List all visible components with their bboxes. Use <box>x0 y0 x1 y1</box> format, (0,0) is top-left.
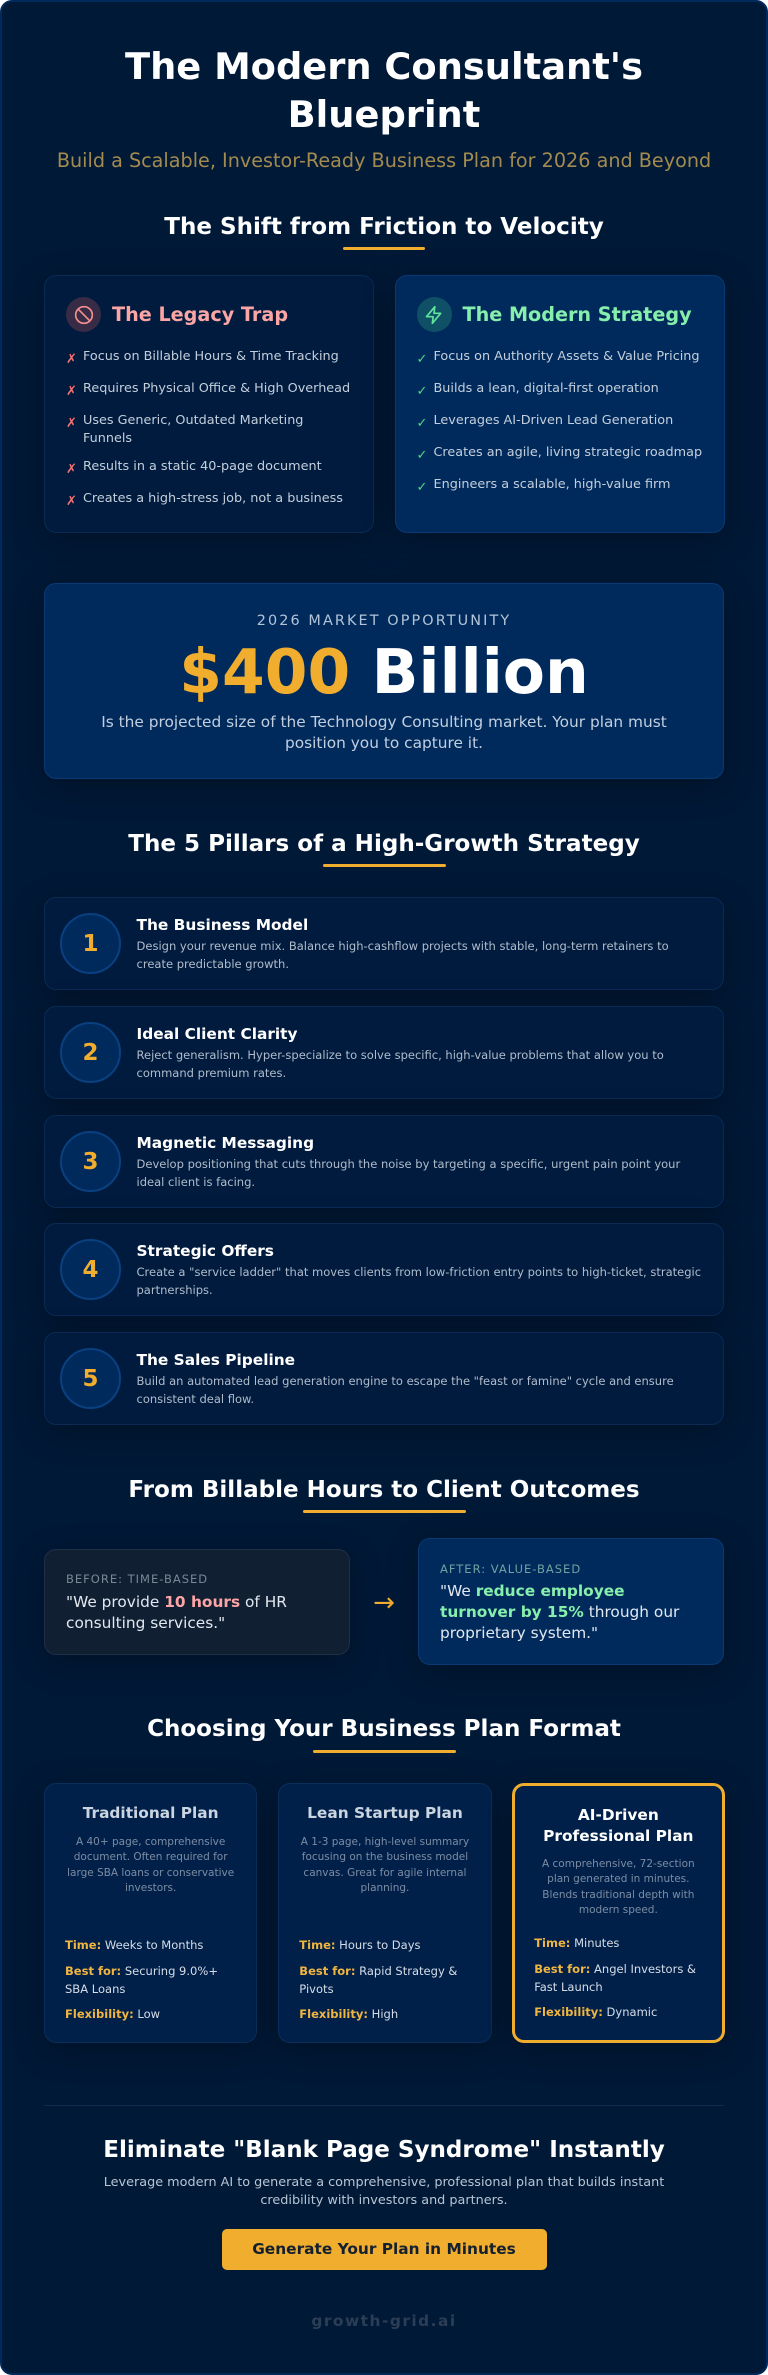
ai best for: Best for: Angel Investors & Fast Launch <box>534 1962 696 1994</box>
number 5: 5 <box>82 1366 98 1392</box>
heading: outcomes: From Billable Hours to Client Outcomes <box>128 1477 640 1503</box>
number 4: 4 <box>82 1256 98 1282</box>
heading: shift: The Shift from Friction to Velocity <box>164 214 604 240</box>
panel: before <box>44 1549 350 1655</box>
number 1: 1 <box>82 930 98 956</box>
pillar 3 <box>44 1115 724 1208</box>
modern list <box>416 348 702 494</box>
traditional flexibility: Flexibility: Low <box>65 2007 160 2021</box>
plan: ai-driven <box>512 1783 725 2043</box>
modern list: Creates an agile, living strategic roadmap <box>434 444 702 460</box>
modern list: ✓ <box>416 448 427 462</box>
ai title: Professional Plan <box>543 1827 694 1845</box>
heading underline <box>312 1750 456 1753</box>
cta button: Generate Your Plan in Minutes <box>252 2240 516 2258</box>
pillar 5 text: Build an automated lead generation engine to escape the "feast or famine" cycle and ensure consistent deal flow. <box>136 1374 674 1406</box>
title <box>125 45 643 136</box>
pillar 2 <box>44 1006 724 1099</box>
number 5 <box>60 1348 121 1409</box>
traditional best for: Best for: Securing 9.0%+ SBA Loans <box>65 1964 218 1996</box>
pillar 5 title: The Sales Pipeline <box>136 1351 295 1369</box>
number 4 <box>60 1239 121 1300</box>
panel: the legacy trap <box>44 275 374 533</box>
cta heading: Eliminate "Blank Page Syndrome" Instantly <box>103 2137 665 2163</box>
pillar 4 <box>44 1223 724 1316</box>
lean time: Time: Hours to Days <box>299 1938 421 1952</box>
traditional time: Time: Weeks to Months <box>65 1938 203 1952</box>
modern list: Focus on Authority Assets & Value Pricing <box>434 348 700 364</box>
ai description: A comprehensive, 72-section plan generated in minutes. Blends traditional depth with modern speed. <box>542 1858 695 1916</box>
legacy list: ✗ <box>66 462 77 476</box>
panel: market opportunity <box>44 583 724 779</box>
number 2: 2 <box>82 1040 98 1066</box>
modern list: ✓ <box>416 384 427 398</box>
number 1 <box>60 913 121 974</box>
traditional title: Traditional Plan <box>83 1804 219 1822</box>
market label: 2026 MARKET OPPORTUNITY <box>257 613 511 629</box>
number 2 <box>60 1022 121 1083</box>
pillar 3 text: Develop positioning that cuts through the noise by targeting a specific, urgent pain point your ideal client is facing. <box>136 1156 680 1188</box>
pillar 1 <box>44 897 724 990</box>
title: Blueprint <box>288 93 480 136</box>
heading underline <box>343 247 425 250</box>
pillar 3 title: Magnetic Messaging <box>136 1134 314 1152</box>
plan: traditional <box>44 1783 257 2043</box>
lean best for: Best for: Rapid Strategy & Pivots <box>299 1964 457 1996</box>
modern list: ✓ <box>416 352 427 366</box>
legacy list: Creates a high-stress job, not a business <box>83 490 343 506</box>
cta button <box>222 2229 546 2270</box>
pillar 4 text: Create a "service ladder" that moves clients from low-friction entry points to high-ticket, strategic partnerships. <box>136 1264 701 1296</box>
lean title: Lean Startup Plan <box>307 1804 463 1822</box>
modern list: Builds a lean, digital-first operation <box>434 380 659 396</box>
lean flexibility: Flexibility: High <box>299 2007 398 2021</box>
modern list: ✓ <box>416 416 427 430</box>
subtitle: Build a Scalable, Investor-Ready Business Plan for 2026 and Beyond <box>57 149 711 172</box>
after quote: "We reduce employee turnover by 15% through our proprietary system." <box>440 1582 679 1642</box>
legacy list: Results in a static 40-page document <box>83 458 322 474</box>
before quote: "We provide 10 hours of HR consulting services." <box>66 1593 287 1632</box>
legacy list: Uses Generic, Outdated Marketing Funnels <box>83 412 303 446</box>
pillar 5 <box>44 1332 724 1425</box>
legacy list: Requires Physical Office & High Overhead <box>83 380 350 396</box>
icon: ban <box>66 297 101 332</box>
legacy list <box>66 348 350 508</box>
modern header: The Modern Strategy <box>462 303 692 326</box>
cta description: Leverage modern AI to generate a comprehensive, professional plan that builds instant credibility with investors and partners. <box>104 2175 664 2208</box>
legacy list: ✗ <box>66 416 77 430</box>
before label: BEFORE: TIME-BASED <box>66 1572 208 1586</box>
legacy list: ✗ <box>66 384 77 398</box>
modern header <box>417 297 692 332</box>
heading: pillars: The 5 Pillars of a High-Growth Strategy <box>128 831 640 857</box>
legacy list: ✗ <box>66 494 77 508</box>
after label: AFTER: VALUE-BASED <box>440 1562 581 1576</box>
ai time: Time: Minutes <box>534 1936 619 1950</box>
pillar 2 text: Reject generalism. Hyper-specialize to solve specific, high-value problems that allow you to command premium rates. <box>136 1048 664 1080</box>
pillar 1 title: The Business Model <box>136 916 308 934</box>
panel: after <box>418 1538 724 1665</box>
ai title: AI-Driven <box>578 1806 659 1824</box>
big number: $400 Billion <box>179 637 589 708</box>
panel: the modern strategy <box>394 275 724 533</box>
heading underline <box>322 864 446 867</box>
title: The Modern Consultant's <box>125 45 643 88</box>
plan: lean startup <box>278 1783 492 2043</box>
lean description: A 1-3 page, high-level summary focusing on the business model canvas. Great for agile internal planning. <box>301 1836 469 1894</box>
legacy header <box>66 297 288 332</box>
legacy list: ✗ <box>66 352 77 366</box>
arrow: → <box>373 1588 395 1618</box>
icon: lightning bolt <box>416 297 452 332</box>
footer brand: growth-grid.ai <box>311 2312 457 2330</box>
legacy header: The Legacy Trap <box>112 303 288 326</box>
traditional description: A 40+ page, comprehensive document. Often required for large SBA loans or conservative investors. <box>67 1836 234 1894</box>
heading: formats: Choosing Your Business Plan Format <box>147 1716 621 1742</box>
heading underline <box>302 1510 466 1513</box>
number 3: 3 <box>82 1148 98 1174</box>
ai flexibility: Flexibility: Dynamic <box>534 2005 657 2019</box>
market description: Is the projected size of the Technology Consulting market. Your plan must position you to capture it. <box>101 713 667 752</box>
modern list: Leverages AI-Driven Lead Generation <box>434 412 673 428</box>
modern list: ✓ <box>416 480 427 494</box>
number 3 <box>60 1131 121 1192</box>
pillar 2 title: Ideal Client Clarity <box>136 1025 298 1043</box>
legacy list: Focus on Billable Hours & Time Tracking <box>83 348 339 364</box>
modern list: Engineers a scalable, high-value firm <box>434 476 671 492</box>
ai title <box>543 1806 694 1845</box>
pillar 1 text: Design your revenue mix. Balance high-cashflow projects with stable, long-term retainers to create predictable growth. <box>136 938 669 970</box>
pillar 4 title: Strategic Offers <box>136 1242 274 1260</box>
